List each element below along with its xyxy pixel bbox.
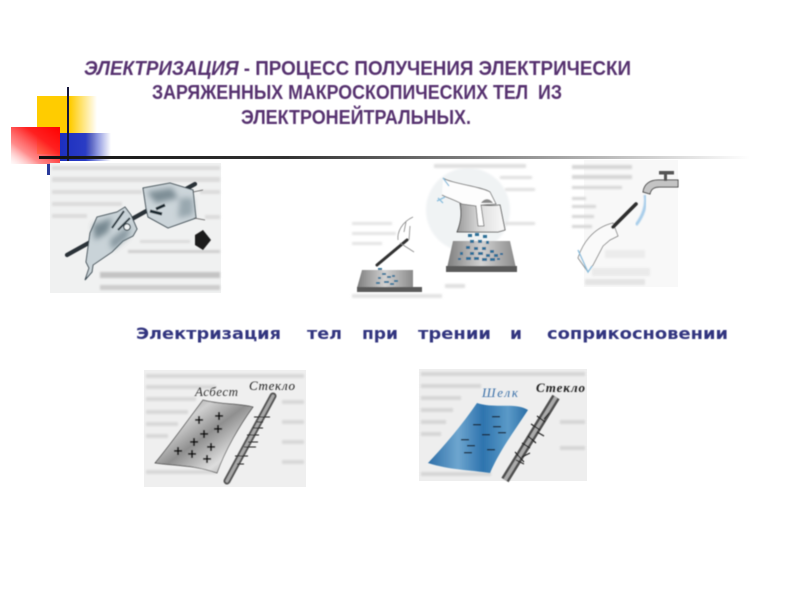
water stream	[636, 195, 646, 225]
caption	[136, 324, 728, 343]
label: glass: Стекло	[249, 378, 296, 393]
caption: Электризация	[136, 324, 281, 343]
asbestos sheet	[155, 400, 253, 473]
illustration: asbestos and glass	[144, 370, 306, 487]
rod charges	[515, 413, 549, 464]
illustration: rod deflecting water stream	[572, 160, 678, 287]
illustration: hands rubbing rod	[50, 163, 221, 293]
right hand	[143, 183, 196, 228]
illustration: hand sprinkling paper over slab	[426, 164, 535, 288]
decorative corner squares	[11, 87, 750, 175]
rod	[613, 204, 636, 227]
left hand shading	[93, 218, 130, 250]
plus charges: +	[206, 439, 216, 456]
plus charges: +	[213, 421, 223, 438]
illustration: silk and glass	[419, 369, 587, 481]
minus charges	[461, 416, 506, 453]
plus charges: +	[189, 434, 199, 451]
illustration: rod attracting paper bits	[352, 217, 442, 298]
slab	[357, 270, 413, 288]
plus charges: +	[194, 412, 204, 429]
hand	[578, 223, 618, 272]
title: ЗАРЯЖЕННЫХ МАКРОСКОПИЧЕСКИХ ТЕЛ ИЗ	[152, 82, 562, 104]
title: ЭЛЕКТРИЗАЦИЯ - ПРОЦЕСС ПОЛУЧЕНИЯ ЭЛЕКТРИЧЕСКИ	[84, 58, 631, 80]
plus charges: +	[202, 451, 212, 468]
glass rod	[227, 396, 273, 481]
rod	[377, 240, 407, 265]
plus charges: +	[173, 443, 183, 460]
plus charges	[173, 408, 224, 468]
slab	[447, 241, 516, 268]
caption: трении	[418, 324, 491, 343]
title	[84, 58, 631, 129]
plus charges: +	[187, 446, 197, 463]
left hand	[85, 207, 137, 280]
title: ЭЛЕКТРОНЕЙТРАЛЬНЫХ.	[241, 105, 471, 129]
plus charges: +	[199, 426, 209, 443]
caption: при	[362, 324, 398, 343]
label: glass: Стекло	[536, 380, 586, 395]
arrow	[195, 230, 211, 250]
right hand shading	[147, 188, 193, 218]
rod	[67, 184, 195, 255]
rod charges	[235, 417, 270, 464]
silk sheet	[428, 403, 528, 473]
caption: и	[510, 324, 522, 343]
glass rod	[505, 397, 556, 480]
sheet of paper	[457, 203, 505, 232]
hand	[398, 217, 414, 252]
hand	[442, 178, 496, 226]
plus charges: +	[214, 408, 224, 425]
caption: тел	[307, 324, 342, 343]
paper bits	[376, 268, 398, 285]
faucet	[643, 180, 678, 194]
label: silk: Шелк	[481, 385, 519, 400]
label: asbestos: Асбест	[194, 384, 238, 399]
caption: соприкосновении	[547, 324, 728, 343]
paper bits	[458, 233, 503, 261]
